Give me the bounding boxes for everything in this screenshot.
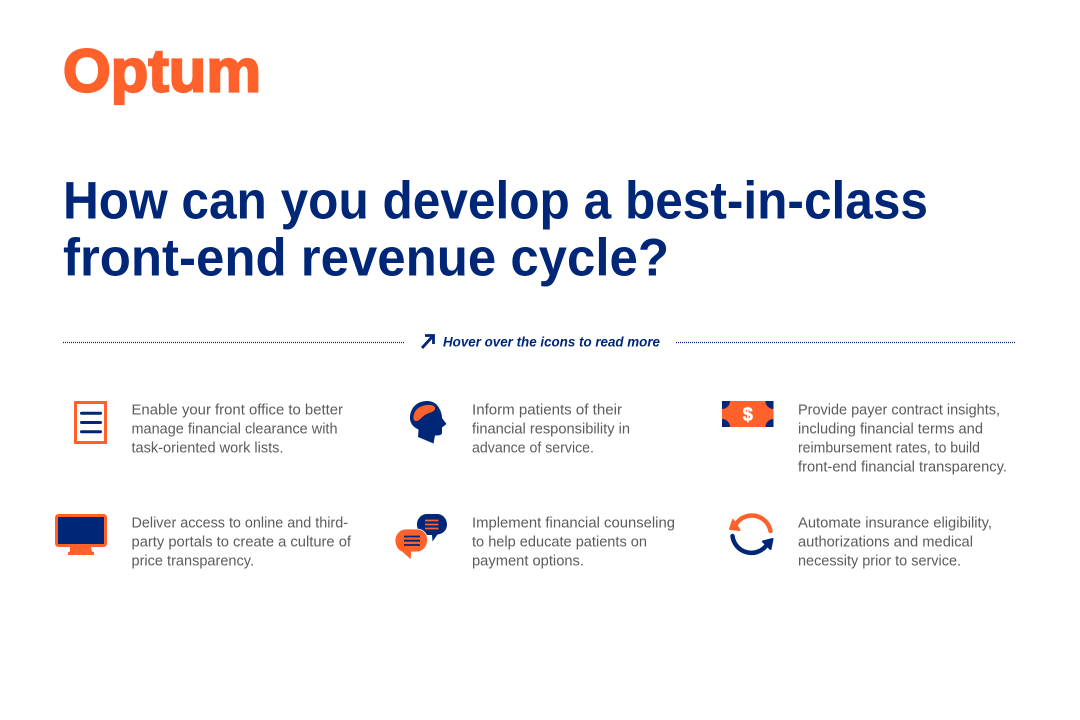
text: payer contract insights: including financial terms and (798, 422, 983, 438)
icon: monitor (56, 516, 106, 555)
text: insurance automation: Automate insurance eligibility, (798, 516, 992, 532)
text: work lists: task-oriented work lists. (132, 440, 284, 456)
text: work lists: Enable your front office to better (132, 402, 343, 418)
text: insurance automation: authorizations and medical (798, 534, 973, 550)
divider with hover prompt (63, 334, 1015, 350)
item: insurance automation (730, 516, 992, 570)
title: How can you develop a best-in-class (63, 172, 928, 230)
title: front-end revenue cycle? (63, 228, 669, 288)
text: payer contract insights: reimbursement rates, to build (798, 440, 980, 456)
icon: speech bubbles (395, 514, 447, 560)
icon: document (76, 402, 106, 442)
prompt text: Hover over the icons to read more (443, 334, 660, 350)
icon: banknote: $ (743, 404, 753, 424)
text: financial responsibility: financial responsibility in (472, 422, 630, 438)
text: financial responsibility: Inform patients of their (472, 402, 622, 418)
text: online portals: party portals to create a culture of (132, 534, 352, 550)
text: online portals: price transparency. (132, 554, 254, 570)
text: financial counseling: payment options. (472, 554, 584, 570)
icon: head with brain (410, 401, 446, 444)
item: financial responsibility (410, 401, 630, 456)
text: payer contract insights: front-end financial transparency. (798, 460, 1007, 476)
text: financial responsibility: advance of service. (472, 440, 594, 456)
text: insurance automation: necessity prior to service. (798, 554, 961, 570)
text: financial counseling: Implement financial counseling (472, 516, 675, 532)
icon: banknote (722, 401, 774, 427)
text: payer contract insights: Provide payer contract insights, (798, 402, 1000, 418)
logo: Optum: Optum (63, 38, 261, 104)
text: work lists: manage financial clearance with (132, 422, 338, 438)
item: work lists (76, 402, 343, 456)
item: financial counseling (395, 514, 675, 570)
icon: refresh arrows (730, 516, 772, 553)
item: payer contract insights (722, 401, 1007, 476)
text: financial counseling: to help educate patients on (472, 534, 647, 550)
icon: arrow (422, 336, 434, 348)
title (63, 172, 928, 288)
item: online portals (56, 516, 352, 570)
text: online portals: Deliver access to online and third- (132, 516, 348, 532)
